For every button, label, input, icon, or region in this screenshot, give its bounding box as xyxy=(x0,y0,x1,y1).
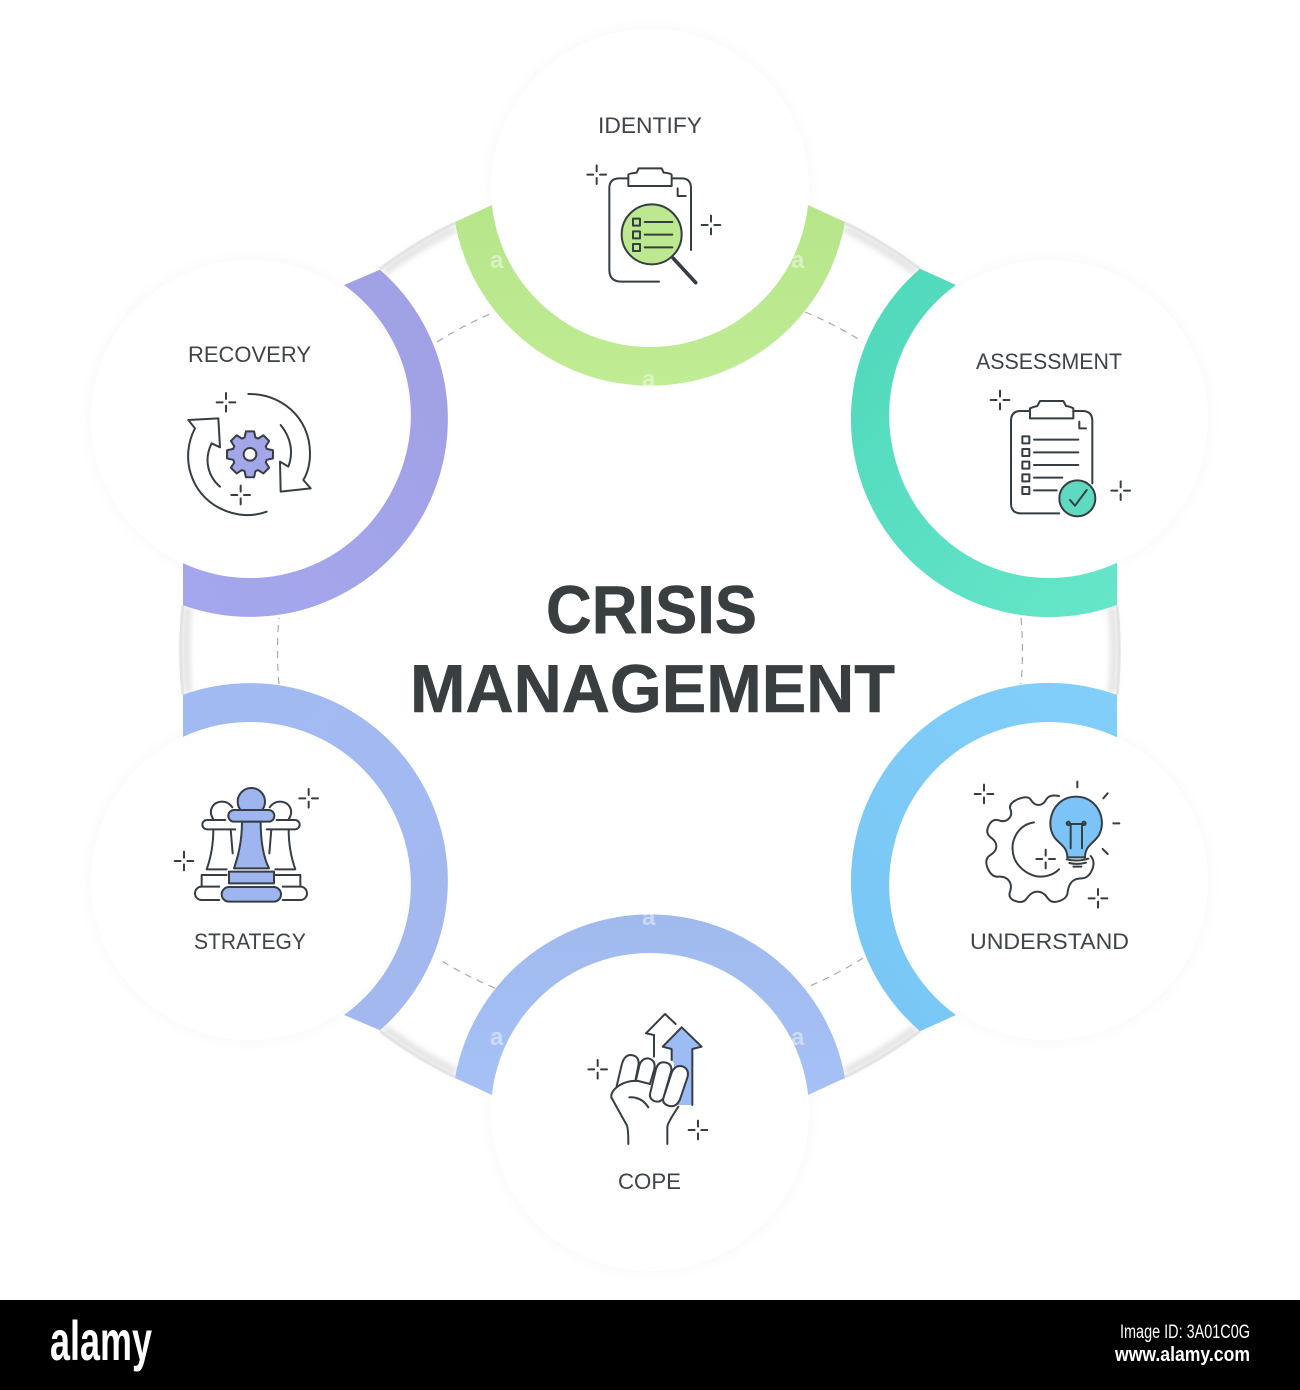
step: identify xyxy=(587,113,720,283)
band: identify (green) xyxy=(455,205,845,386)
footer logo: alamy: alamy xyxy=(50,1309,152,1372)
watermark marks xyxy=(490,247,805,1051)
footer image id: Image ID: 3A01C0G xyxy=(1120,1322,1250,1343)
title: CRISIS xyxy=(546,572,757,648)
watermark marks: a xyxy=(490,247,504,274)
band: assessment (teal) xyxy=(851,269,1117,617)
band: recovery (violet) xyxy=(183,270,448,617)
step: cope xyxy=(588,1014,707,1194)
step: assessment xyxy=(976,349,1130,516)
icon: gear with circular arrows xyxy=(188,393,311,515)
step: strategy xyxy=(175,788,318,954)
soft disc shadows xyxy=(91,29,1208,1271)
watermark marks: a xyxy=(791,247,805,274)
title xyxy=(410,572,895,727)
watermark marks: a xyxy=(490,1024,504,1051)
title: MANAGEMENT xyxy=(410,651,895,727)
icon: raised fist with arrows xyxy=(588,1014,707,1144)
icon: chess pawns xyxy=(175,788,318,902)
label: understand: UNDERSTAND xyxy=(970,929,1129,954)
watermark marks: a xyxy=(642,366,656,393)
watermark marks: a xyxy=(791,1024,805,1051)
icon: clipboard with magnifier xyxy=(587,165,720,283)
band: understand (sky blue) xyxy=(851,683,1117,1031)
footer url: www.alamy.com xyxy=(1114,1344,1250,1366)
icon: checklist clipboard xyxy=(991,391,1130,516)
label: strategy: STRATEGY xyxy=(194,929,306,954)
label: cope: COPE xyxy=(618,1169,681,1194)
band: cope (periwinkle blue) xyxy=(455,914,845,1095)
band: strategy (indigo blue) xyxy=(183,683,448,1030)
hexagon connector: inner dashed links xyxy=(278,312,1022,988)
label: assessment: ASSESSMENT xyxy=(976,349,1122,374)
step: recovery xyxy=(188,342,311,515)
hexagon connector: grey outer links xyxy=(181,223,1119,1077)
label: recovery: RECOVERY xyxy=(188,342,311,367)
footer bar xyxy=(0,1300,1300,1390)
watermark marks: a xyxy=(642,904,656,931)
step: understand xyxy=(970,782,1129,954)
icon: gear and light bulb xyxy=(975,782,1119,908)
label: identify: IDENTIFY xyxy=(598,113,702,138)
white step discs xyxy=(91,29,1208,1271)
